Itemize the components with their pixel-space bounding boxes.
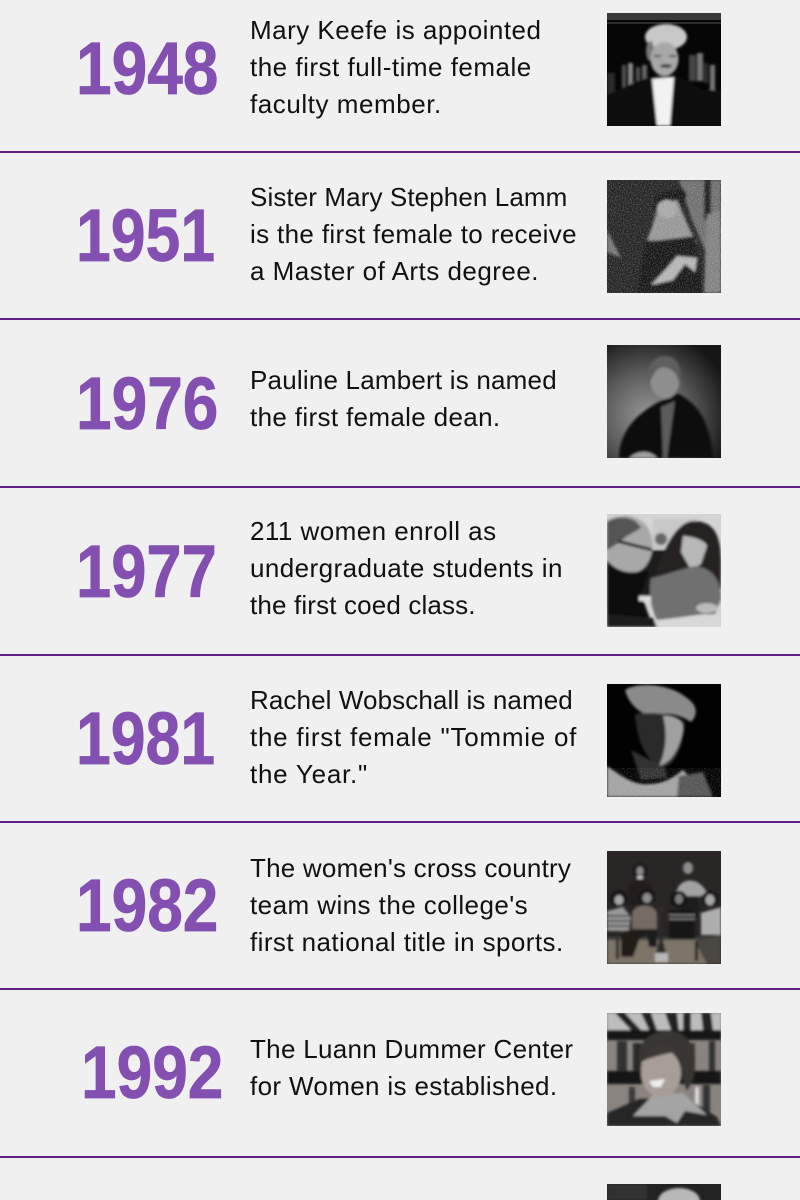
text: Mary Keefe [250,15,541,119]
divider [0,318,800,320]
text: Pauline Lambert: Pauline Lambert is named [250,365,557,395]
photo: Luann Dummer portrait [607,1013,721,1126]
text: Luann Dummer Center: for Women is established. [250,1071,557,1101]
year: 1982: 1982 [76,864,218,947]
divider [0,821,800,823]
divider [0,486,800,488]
text: cross country: team wins the college's [250,890,528,920]
divider [0,654,800,656]
text: cross country [250,853,571,957]
text: Sister Mary Stephen Lamm: Sister Mary Stephen Lamm [250,182,567,212]
photo: Rachel Wobschall portrait [607,684,721,797]
year: 1948: 1948 [76,27,218,110]
year: 1976: 1976 [76,362,218,445]
year: 1951: 1951 [76,194,215,277]
photo: cross country team [607,851,721,964]
text: Pauline Lambert [250,365,557,432]
text: Sister Mary Stephen Lamm: is the first female to receive [250,219,577,249]
text: Sister Mary Stephen Lamm [250,182,577,286]
photo: Sister Mary Stephen Lamm [607,180,721,293]
text: 211 women [250,516,563,620]
text: cross country: The women's cross country [250,853,571,883]
photo: Pauline Lambert portrait [607,345,721,458]
text: Luann Dummer Center: The Luann Dummer Center [250,1034,573,1064]
text: Luann Dummer Center [250,1034,573,1101]
text: 211 women: 211 women enroll as [250,516,497,546]
text: cross country: first national title in sports. [250,927,564,957]
year: 1992: 1992 [81,1031,223,1114]
text: Rachel Wobschall [250,685,577,789]
text: Rachel Wobschall: the Year." [250,759,368,789]
photo: Mary Keefe portrait [607,13,721,126]
text: Mary Keefe: faculty member. [250,89,442,119]
year: 1977: 1977 [76,530,217,613]
divider [0,988,800,990]
text: 211 women: the first coed class. [250,590,476,620]
year: 1981: 1981 [76,697,215,780]
text: Rachel Wobschall: the first female "Tommie of [250,722,577,752]
text: Pauline Lambert: the first female dean. [250,402,500,432]
text: 211 women: undergraduate students in [250,553,563,583]
divider [0,1156,800,1158]
text: Rachel Wobschall: Rachel Wobschall is named [250,685,573,715]
text: Sister Mary Stephen Lamm: a Master of Arts degree. [250,256,539,286]
text: Mary Keefe: Mary Keefe is appointed [250,15,541,45]
photo: priest and student [607,514,721,627]
photo: next entry portrait, cropped [607,1184,721,1200]
text: Mary Keefe: the first full-time female [250,52,532,82]
divider [0,151,800,153]
